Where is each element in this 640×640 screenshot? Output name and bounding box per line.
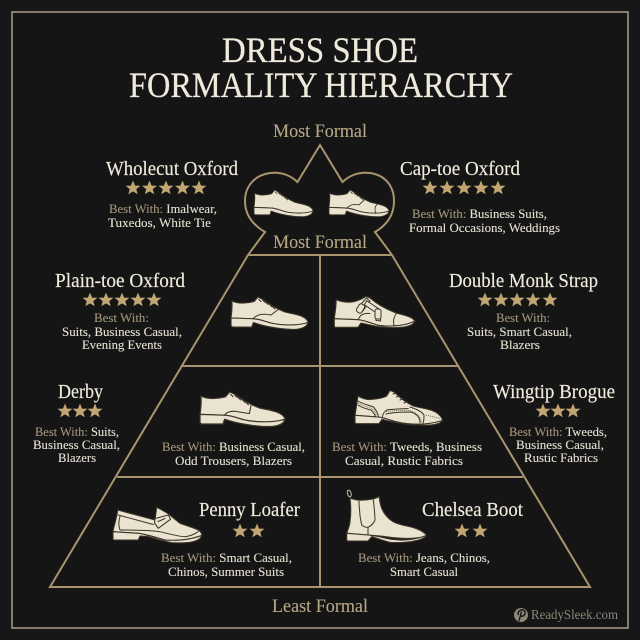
label: most formal second: Most Formal [273, 233, 367, 253]
panel: chelsea boot text [358, 500, 524, 579]
panel: wingtip pairing text: Best With: Tweeds, Business [332, 439, 482, 454]
icon: wingtip brogue shoe [355, 390, 442, 425]
panel: double monk strap text: Suits, Smart Casual, [467, 324, 572, 339]
panel: wingtip brogue text: Rustic Fabrics [524, 450, 598, 465]
panel: penny loafer text: Best With: Smart Casual, [161, 550, 292, 565]
panel: plain-toe oxford text: Best With: [94, 310, 149, 325]
title: FORMALITY HIERARCHY [129, 65, 513, 105]
panel: double monk strap text [449, 271, 598, 352]
panel: chelsea boot text: Best With: Jeans, Chinos, [358, 550, 490, 565]
panel: penny loafer text: Chinos, Summer Suits [168, 564, 284, 579]
panel: wingtip pairing text: Casual, Rustic Fabrics [345, 453, 463, 468]
panel: derby text: Business Casual, [33, 437, 120, 452]
panel: wholecut oxford text: Tuxedos, White Tie [108, 215, 211, 230]
icon: plain-toe oxford shoe [231, 297, 308, 329]
panel: derby text: Best With: Suits, [35, 424, 119, 439]
pyramid outline [50, 145, 590, 587]
label: most formal top: Most Formal [273, 122, 367, 142]
icon: wholecut oxford shoe [254, 190, 313, 217]
panel: cap-toe oxford text: Best With: Business Suits, [412, 206, 547, 221]
panel: chelsea boot text: Smart Casual [390, 564, 458, 579]
icon: double monk strap shoe [334, 296, 415, 328]
panel: plain-toe oxford text: Suits, Business Casual, [62, 324, 182, 339]
panel: wingtip brogue text: Wingtip Brogue [493, 382, 615, 403]
panel: cap-toe oxford text: Cap-toe Oxford [400, 159, 520, 180]
panel: wholecut oxford text: Best With: Imalwear, [109, 201, 217, 216]
icon: cap-toe oxford shoe [329, 190, 389, 217]
watermark: ReadySleek.com [531, 607, 618, 622]
panel: derby text: Derby [58, 382, 103, 403]
panel: chelsea boot text: Chelsea Boot [422, 500, 524, 521]
panel: penny loafer text [161, 500, 300, 579]
panel: derby text [33, 382, 120, 465]
panel: cap-toe oxford text: Formal Occasions, Weddings [409, 220, 560, 235]
label: least formal: Least Formal [272, 597, 368, 617]
icon: penny loafer shoe [113, 507, 202, 543]
panel: wholecut oxford text [106, 159, 238, 230]
icon: derby shoe [200, 392, 285, 427]
panel: plain-toe oxford text: Plain-toe Oxford [55, 271, 185, 292]
panel: double monk strap text: Blazers [500, 337, 540, 352]
panel: derby pairing text [162, 439, 305, 468]
panel: derby pairing text: Odd Trousers, Blazers [175, 453, 292, 468]
title [129, 30, 513, 105]
panel: plain-toe oxford text: Evening Events [82, 337, 162, 352]
panel: penny loafer text: Penny Loafer [199, 500, 300, 521]
panel: wingtip brogue text [493, 382, 615, 465]
panel: wingtip brogue text: Best With: Tweeds, [509, 424, 607, 439]
title: DRESS SHOE [222, 30, 418, 70]
panel: wingtip pairing text [332, 439, 482, 468]
panel: double monk strap text: Best With: [496, 310, 550, 325]
panel: wholecut oxford text: Wholecut Oxford [106, 159, 238, 180]
icon: chelsea boot [347, 490, 426, 543]
panel: derby text: Blazers [58, 450, 96, 465]
panel: plain-toe oxford text [55, 271, 185, 352]
panel: derby pairing text: Best With: Business Casual, [162, 439, 305, 454]
panel: wingtip brogue text: Business Casual, [516, 437, 604, 452]
panel: cap-toe oxford text [400, 159, 560, 235]
panel: double monk strap text: Double Monk Strap [449, 271, 598, 292]
